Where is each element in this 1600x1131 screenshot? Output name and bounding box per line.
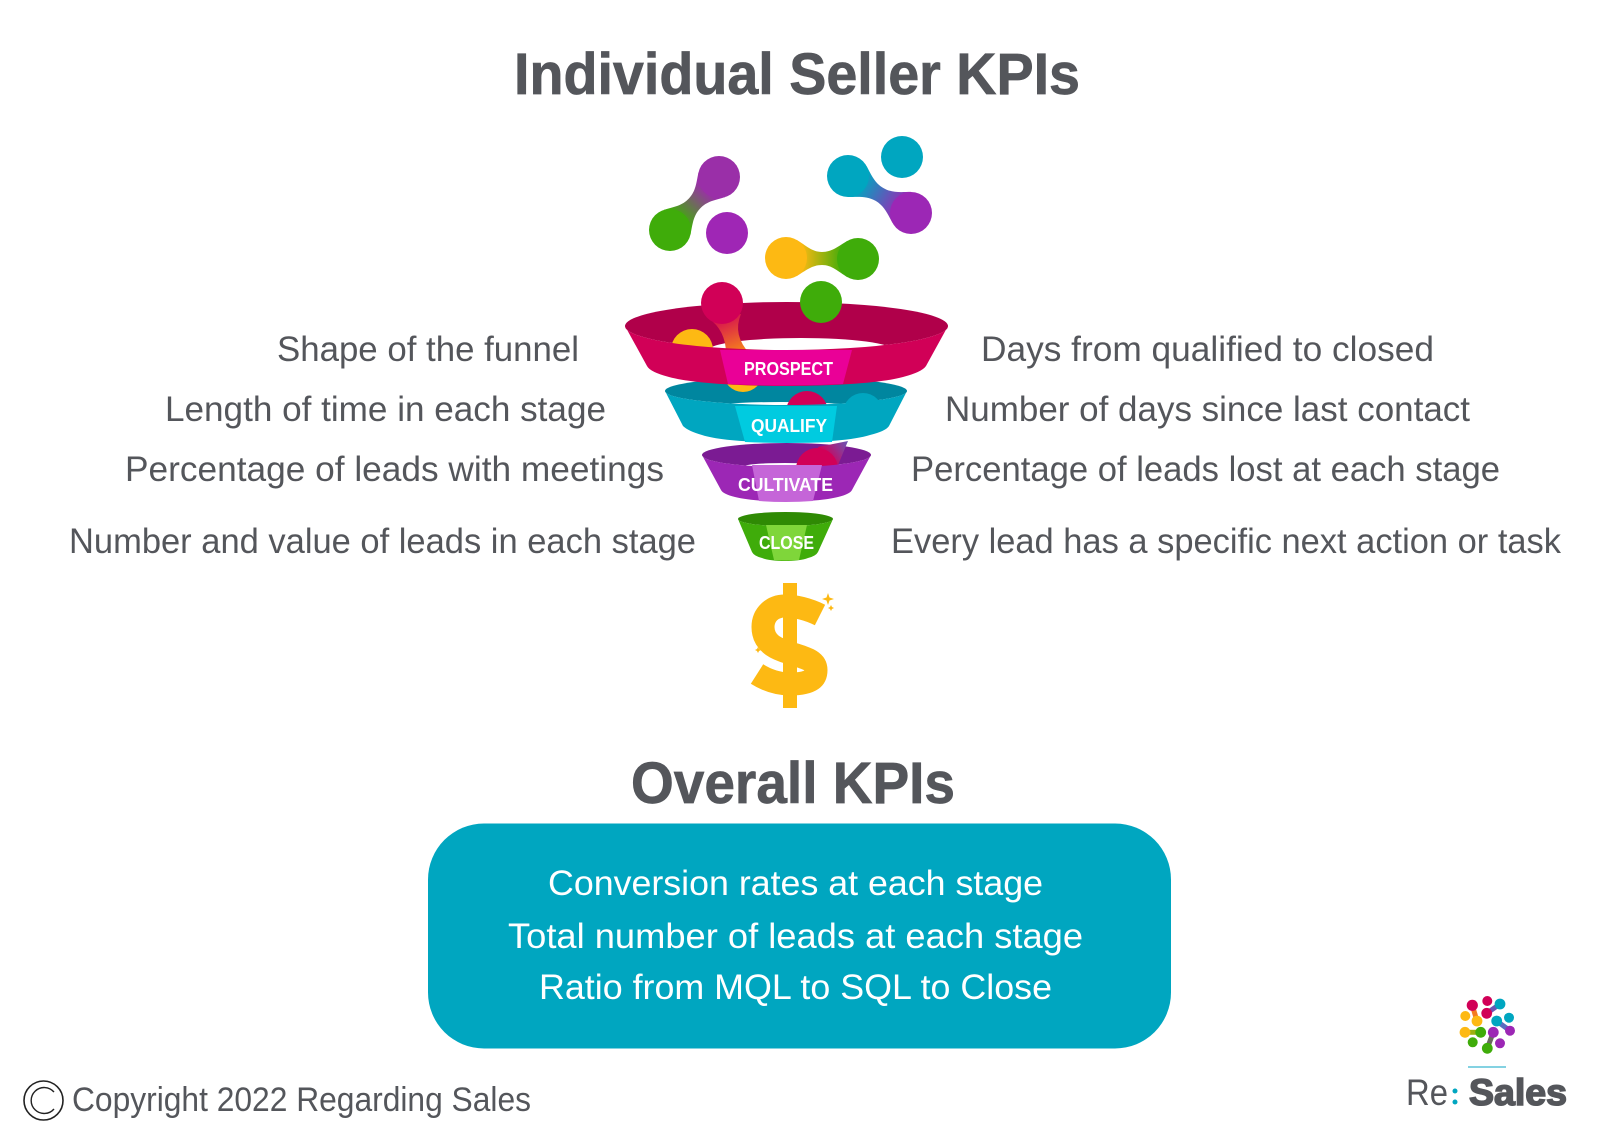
heading: overall KPIs: Overall KPIs [631,751,955,816]
panel: overall KPIs: Conversion rates at each stage [548,864,1043,903]
copyright text: Copyright 2022 Regarding Sales [72,1081,531,1119]
logo: Re:Sales: Re [1406,1072,1448,1113]
funnel stage: prospect [625,281,948,386]
funnel stage: qualify: QUALIFY [751,416,827,436]
right KPI list: Days from qualified to closed [981,330,1434,369]
right KPI list [891,330,1561,561]
icon: dollar sign [755,583,834,708]
icon: purple and green molecule [649,156,748,254]
left KPI list: Shape of the funnel [277,330,579,369]
funnel stage: qualify [665,352,907,443]
funnel stage: close: CLOSE [759,533,814,553]
funnel stage: cultivate: CULTIVATE [738,475,833,495]
right KPI list: Percentage of leads lost at each stage [911,450,1500,489]
logo: Re:Sales: Sales [1469,1072,1567,1113]
panel: overall KPIs: Ratio from MQL to SQL to Close [539,968,1052,1007]
title: Individual Seller KPIs [514,42,1080,107]
right KPI list: Every lead has a specific next action or task [891,522,1561,561]
funnel stage: cultivate [702,441,871,502]
icon: copyright symbol [24,1081,63,1120]
funnel stage: close [738,512,833,561]
panel: overall KPIs [428,824,1171,1048]
left KPI list: Length of time in each stage [165,390,606,429]
left KPI list: Number and value of leads in each stage [69,522,696,561]
icon: yellow and green molecule [765,237,879,280]
icon: blue and purple molecule [827,136,932,234]
panel: overall KPIs: Total number of leads at each stage [508,917,1083,956]
funnel stage: prospect: PROSPECT [744,359,833,379]
right KPI list: Number of days since last contact [945,390,1470,429]
logo: Re:Sales [1406,996,1567,1113]
left KPI list [69,330,696,561]
left KPI list: Percentage of leads with meetings [125,450,664,489]
